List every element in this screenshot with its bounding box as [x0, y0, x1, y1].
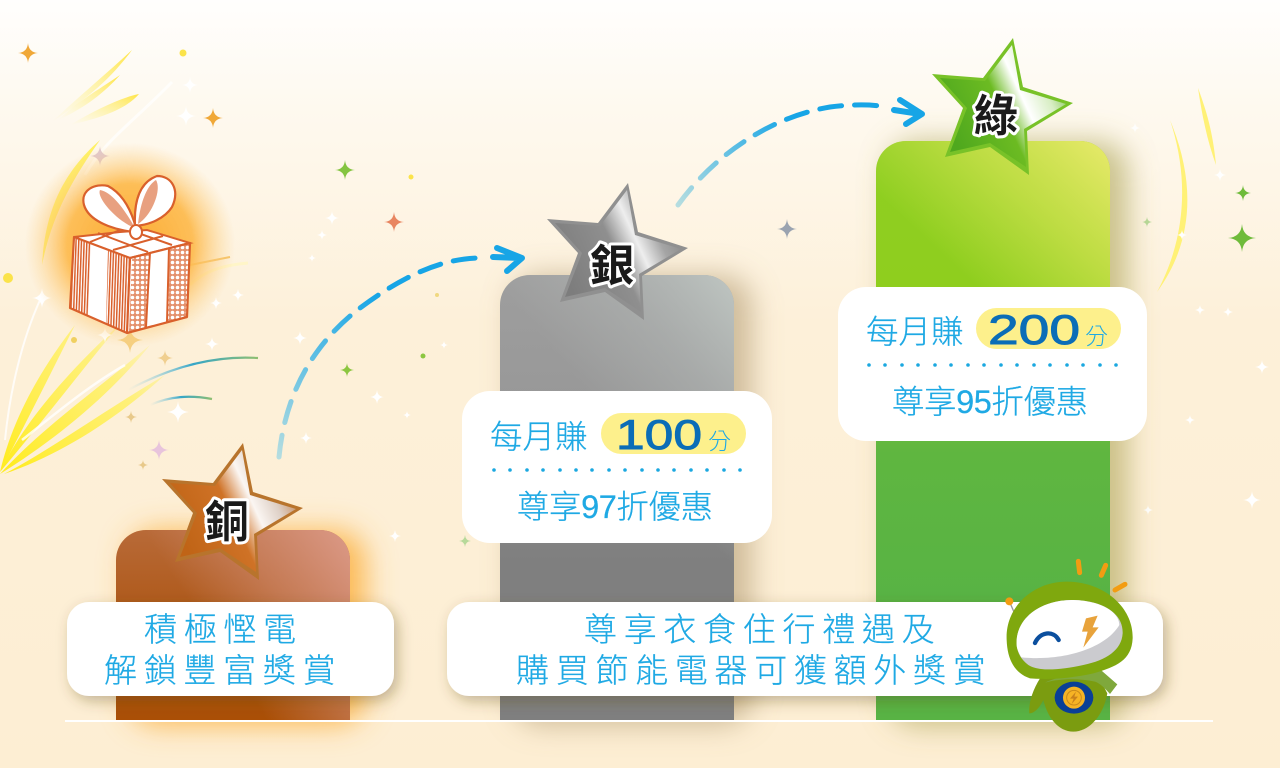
robot mascot — [1005, 561, 1133, 732]
panel: green tier: 200 — [988, 306, 1080, 353]
panel: silver tier: 每月賺 — [490, 419, 588, 455]
panel: benefits message — [447, 602, 1163, 696]
panel: silver tier: 100 — [616, 411, 702, 458]
panel: silver tier: 尊享97折優惠 — [517, 489, 713, 525]
arrow: silver to green — [678, 100, 922, 205]
panel: green tier: 每月賺 — [866, 314, 964, 350]
panel: silver tier: 分 — [708, 428, 731, 454]
arrow: copper to silver — [279, 248, 522, 457]
fireworks left — [0, 50, 258, 474]
bar: silver — [500, 275, 734, 720]
panel: green tier — [838, 287, 1147, 441]
star: silver — [547, 183, 688, 320]
panel: benefits message: 尊享衣食住行禮遇及 — [584, 611, 941, 648]
panel: copper message: 解鎖豐富獎賞 — [104, 652, 342, 689]
ground line — [65, 720, 1213, 722]
star: copper — [162, 443, 303, 580]
sparkles — [3, 43, 1269, 547]
fireworks right — [1157, 88, 1216, 292]
panel: silver tier — [462, 391, 772, 543]
star: silver: 銀 — [590, 242, 634, 291]
bar: copper — [116, 530, 350, 720]
panel: benefits message: 購買節能電器可獲額外獎賞 — [516, 652, 992, 689]
star: green: 綠 — [974, 92, 1018, 141]
star: green — [932, 38, 1073, 175]
star: copper: 銅 — [205, 498, 249, 547]
bar shadows — [128, 141, 1128, 726]
panel: green tier: 尊享95折優惠 — [892, 384, 1088, 420]
panel: copper message — [67, 602, 394, 696]
gift box icon — [25, 143, 235, 347]
panel: copper message: 積極慳電 — [144, 611, 303, 648]
panel: green tier: 分 — [1085, 323, 1108, 349]
bar: green — [876, 141, 1110, 720]
